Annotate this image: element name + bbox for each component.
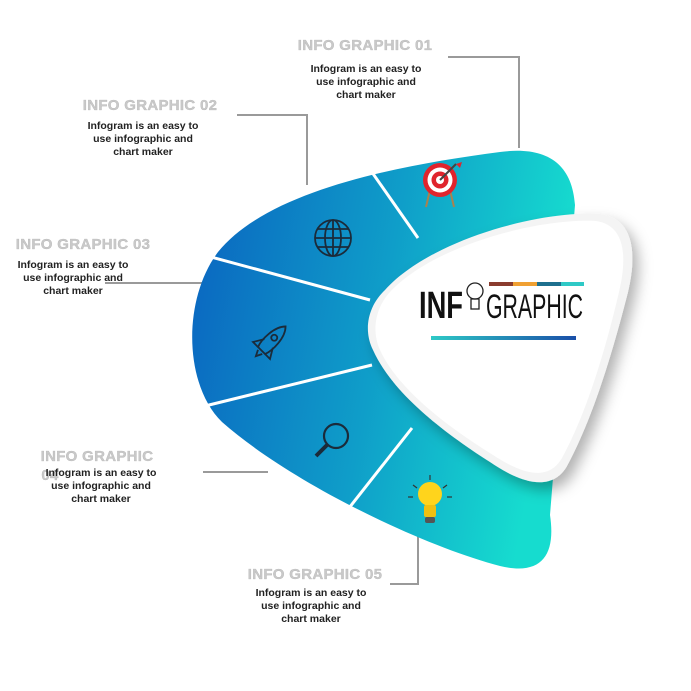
text: info 02: chart maker	[113, 146, 173, 158]
text: info 04	[41, 448, 156, 505]
text: info 02	[83, 97, 217, 158]
text: info 05: INFO GRAPHIC 05	[248, 566, 382, 583]
text: info 04: Infogram is an easy to	[46, 467, 156, 479]
text: info 03: Infogram is an easy to	[18, 259, 128, 271]
text: info 04: 04	[41, 467, 59, 484]
dividers	[200, 158, 418, 522]
text: info 04: chart maker	[71, 493, 131, 505]
logo: GRAPHIC	[486, 288, 583, 326]
text: info 05	[248, 566, 382, 625]
text: info 03: INFO GRAPHIC 03	[16, 236, 150, 253]
logo	[419, 282, 584, 340]
text: info 01	[298, 37, 432, 101]
text: info 02: INFO GRAPHIC 02	[83, 97, 217, 114]
callout lines	[105, 57, 519, 584]
main blue shape	[192, 151, 575, 568]
icon: magnifier	[316, 424, 348, 456]
text: info 01: Infogram is an easy to	[311, 63, 421, 75]
text: info 03: chart maker	[43, 285, 103, 297]
text: info 05: Infogram is an easy to	[256, 587, 366, 599]
text: info 05: use infographic and	[261, 600, 361, 612]
text: info 04: use infographic and	[51, 480, 151, 492]
icon: target	[423, 162, 462, 207]
center white triangle	[368, 214, 632, 482]
text: info 05: chart maker	[281, 613, 341, 625]
icon: rocket	[247, 318, 294, 365]
text: info 01: use infographic and	[316, 76, 416, 88]
text: info 03	[16, 236, 150, 297]
icon: globe	[315, 220, 351, 256]
text: info 01: chart maker	[336, 89, 396, 101]
text: info 02: use infographic and	[93, 133, 193, 145]
text: info 01: INFO GRAPHIC 01	[298, 37, 432, 54]
text: info 02: Infogram is an easy to	[88, 120, 198, 132]
text: info 03: use infographic and	[23, 272, 123, 284]
icon: lightbulb	[408, 475, 452, 523]
text: info 04: INFO GRAPHIC	[41, 448, 153, 465]
logo: INF	[419, 285, 463, 327]
